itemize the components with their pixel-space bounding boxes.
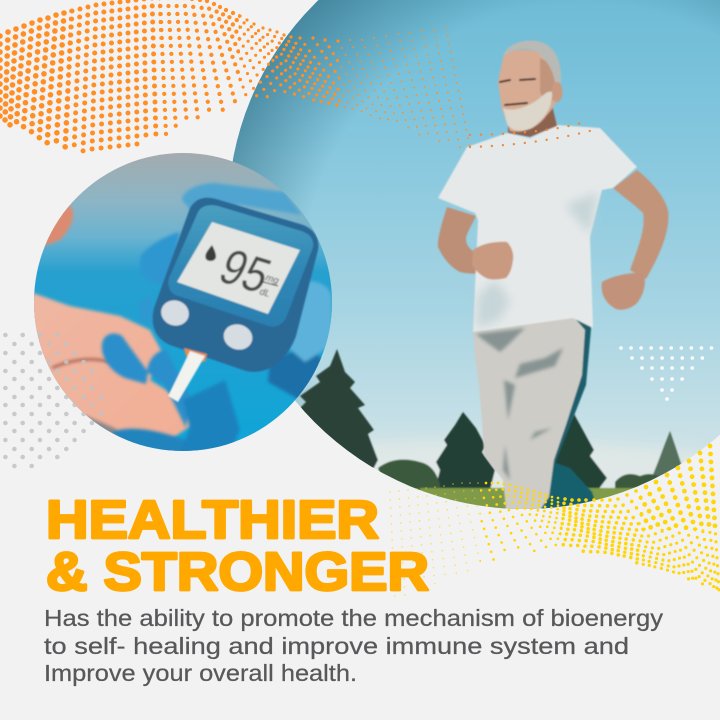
white triangle dots [621,348,714,399]
body text: to self- healing and improve immune system and [44,633,629,659]
blood drop icon [205,245,216,261]
face [498,50,558,132]
tree: pine behind legs [550,414,607,490]
left arm [438,207,482,274]
right arm [613,170,668,279]
tree: middle pine [435,412,495,490]
test strip [168,351,205,402]
reading 95: 95 [211,239,279,303]
ear [552,82,562,102]
body text: Improve your overall health. [44,660,357,686]
face shade [540,58,555,101]
left fist [472,242,513,280]
meter button right [220,321,256,353]
unit mg per dL [258,272,281,300]
back leg [540,462,595,508]
panel: glucose meter photo [30,153,332,455]
sky [220,0,720,520]
meter face [168,205,313,327]
neck [508,105,557,137]
trousers [473,316,585,510]
panel: circular running photo [220,0,720,520]
unit mg per dL: mg [264,272,281,287]
heading: HEALTHIER & STRONGER: & STRONGER [46,542,429,602]
hand shadow [86,414,122,438]
right fist [602,273,645,310]
tree: far right pine [652,430,682,477]
blue gloved fingers [102,183,332,455]
distant trees and grass [300,348,698,509]
blood glucose meter [153,198,318,402]
dots across shoulder [470,122,600,147]
photo background [34,153,332,451]
bushes [377,458,658,490]
meter button left [158,297,192,329]
man jogging [438,41,668,512]
gap between fingers [52,360,110,368]
hand with fingers [30,292,192,450]
top left fingertip [44,204,75,248]
trousers folds [476,328,563,480]
shirt shading [476,192,598,328]
heading: HEALTHIER & STRONGER [46,490,429,602]
orange halftone wave, top left running over photo [0,0,600,152]
heading: HEALTHIER & STRONGER: HEALTHIER [46,490,379,550]
t-shirt [438,125,637,332]
trousers shadow [552,320,592,463]
vignette [232,0,720,407]
body text [44,605,664,686]
eyes and mouth [500,79,535,105]
yellow halftone wave, bottom right [390,446,719,600]
beard [503,92,552,131]
screen [177,222,300,314]
body text: Has the ability to promote the mechanism of bioenergy [44,605,664,631]
meter body [153,198,318,372]
hair [503,41,561,84]
unit mg per dL: dL [258,286,271,300]
tree: left pine [300,348,379,468]
grass [419,487,635,509]
grey halftone dots, left [5,335,103,466]
test strip port [184,348,207,362]
